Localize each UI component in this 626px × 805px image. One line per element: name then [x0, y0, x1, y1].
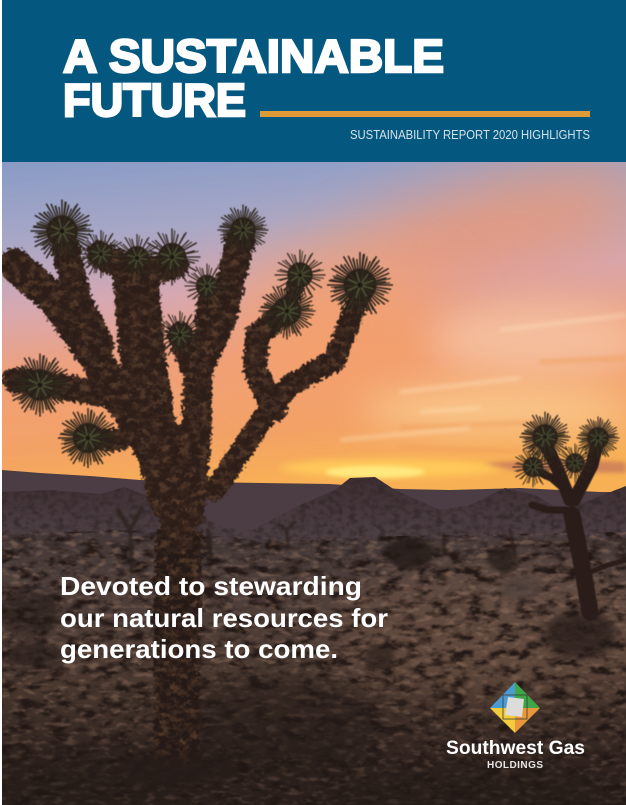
sky	[2, 146, 626, 492]
accent rule	[260, 111, 590, 117]
right Joshua tree	[513, 410, 626, 612]
distant mountains	[2, 470, 626, 545]
desert ground	[0, 520, 626, 805]
small background trees	[118, 508, 515, 572]
header band	[2, 0, 626, 162]
white left edge	[0, 0, 2, 805]
tagline: generations to come.	[60, 634, 338, 664]
tree silhouette	[15, 240, 362, 765]
title: FUTURE	[63, 74, 246, 126]
lower trunk shading	[154, 560, 200, 765]
tagline	[60, 571, 388, 664]
trunk base shadow	[118, 752, 238, 788]
yucca crowns	[6, 198, 396, 470]
sub-wordmark: HOLDINGS	[487, 760, 543, 771]
shrubs	[0, 537, 616, 805]
foreground Joshua tree	[6, 198, 396, 788]
icon: diamond mark	[490, 682, 540, 733]
tagline: Devoted to stewarding	[60, 571, 362, 601]
title	[63, 30, 444, 126]
tagline: our natural resources for	[60, 603, 388, 633]
wordmark: Southwest Gas	[446, 737, 585, 759]
title: A SUSTAINABLE	[63, 30, 444, 82]
logo: Southwest Gas Holdings	[446, 682, 585, 771]
subtitle: SUSTAINABILITY REPORT 2020 HIGHLIGHTS	[350, 128, 590, 142]
